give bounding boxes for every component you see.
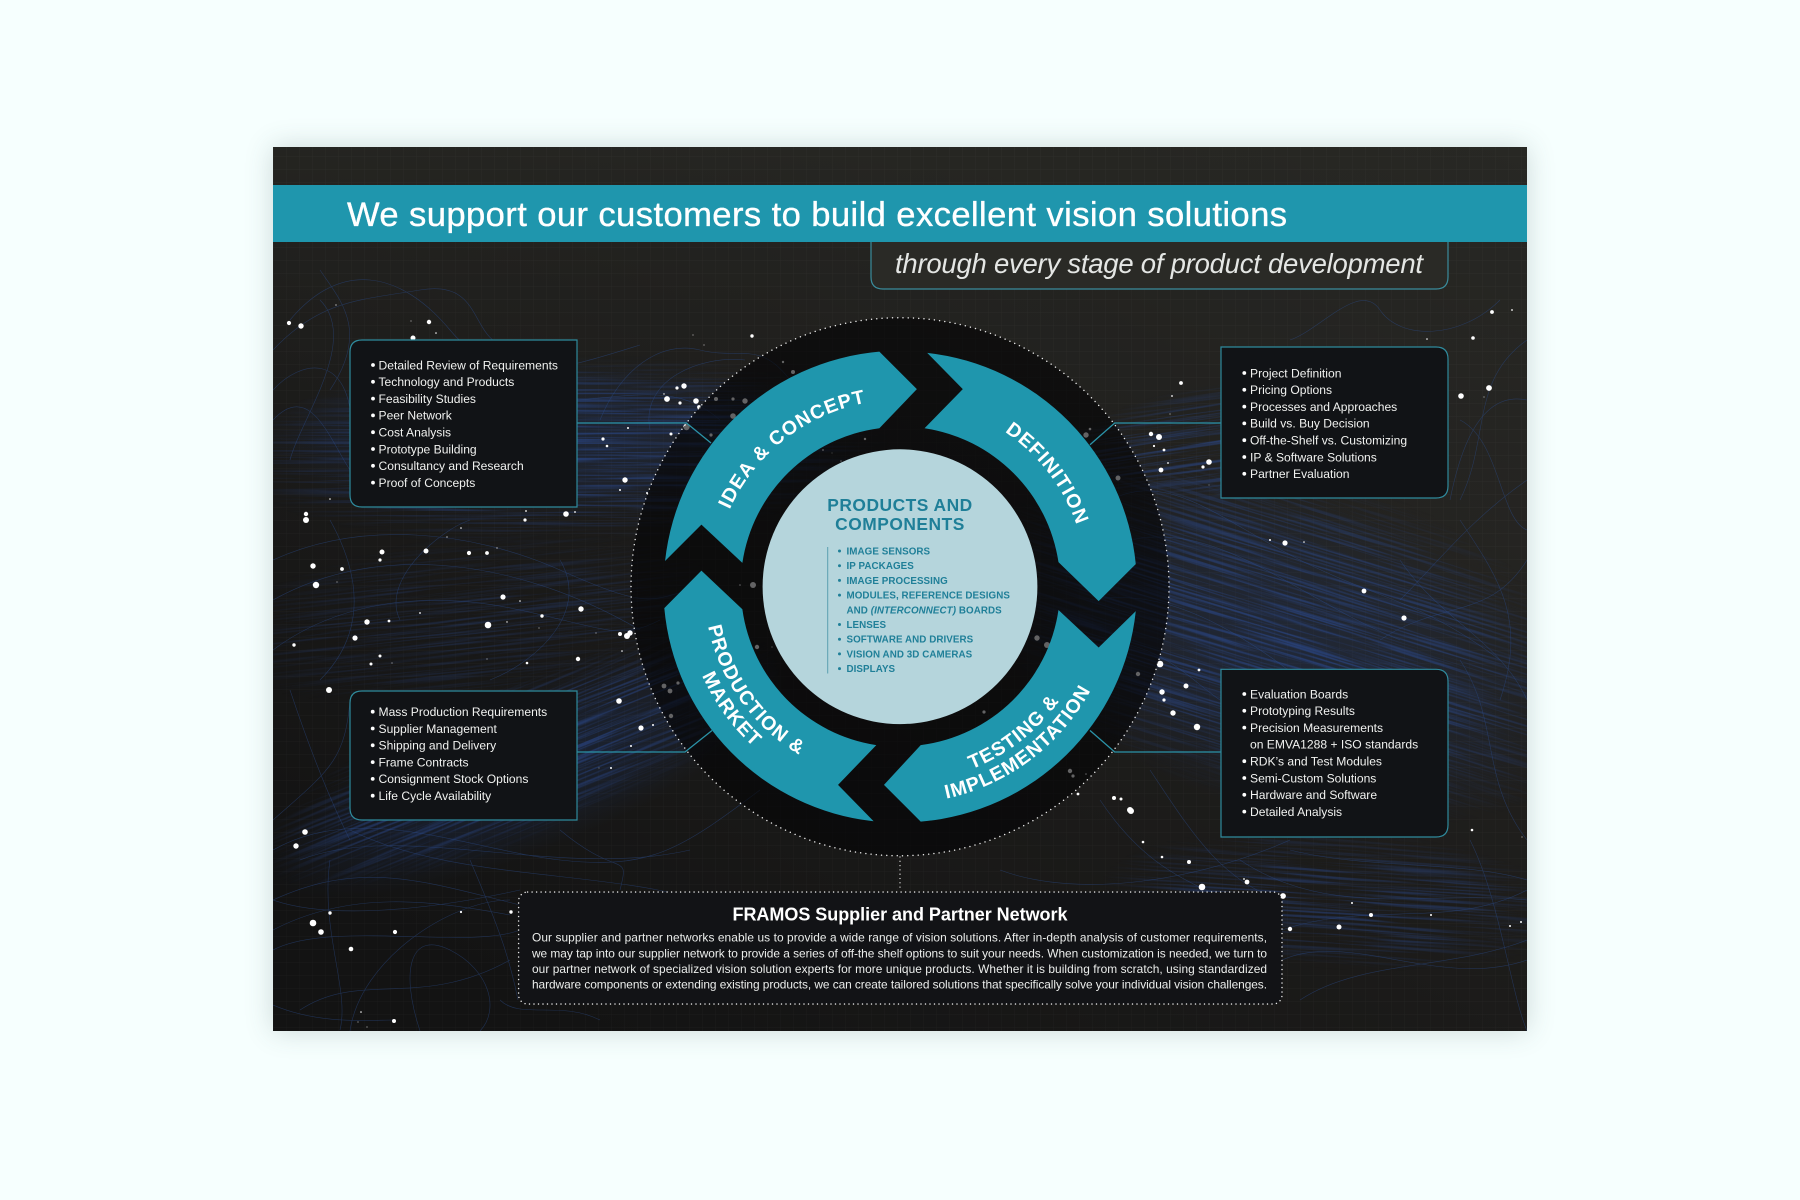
panel: products and components [763, 449, 1037, 724]
subtitle box: through every stage of product development [895, 248, 1424, 279]
panel: production and market details: Supplier Management [378, 722, 497, 736]
products heading: COMPONENTS [835, 514, 965, 534]
header band [273, 185, 1527, 242]
arrow: testing and implementation [884, 610, 1136, 822]
panel: testing and implementation details: Prototyping Results [1250, 704, 1355, 718]
network body text [531, 930, 1267, 992]
label: testing and implementation: IMPLEMENTATION [944, 685, 1090, 798]
products list: LENSES [846, 620, 887, 631]
subtitle box [871, 242, 1448, 289]
panel: definition details: Off-the-Shelf vs. Customizing [1250, 434, 1407, 448]
products list: MODULES, REFERENCE DESIGNS [846, 591, 1010, 602]
label: definition: DEFINITION [1006, 422, 1089, 524]
panel: production and market details: Consignment Stock Options [378, 772, 528, 786]
panel: idea and concept details: Cost Analysis [378, 426, 451, 440]
panel: idea and concept details: Consultancy and Research [378, 459, 524, 473]
panel: testing and implementation details: Detailed Analysis [1250, 805, 1342, 819]
panel: idea and concept details: Technology and Products [378, 375, 514, 389]
infographic card [273, 147, 1527, 1031]
panel: testing and implementation details: Hardware and Software [1250, 788, 1377, 802]
products list: VISION AND 3D CAMERAS [846, 649, 973, 660]
panel: testing and implementation details: RDK’s and Test Modules [1250, 754, 1382, 768]
products list: IMAGE PROCESSING [846, 576, 948, 587]
panel: idea and concept details [350, 340, 577, 507]
panel: production and market details: Frame Contracts [378, 755, 469, 769]
panel: production and market details: Shipping and Delivery [378, 739, 497, 753]
panel: testing and implementation details: Evaluation Boards [1250, 687, 1348, 701]
products list: AND (INTERCONNECT) BOARDS [846, 605, 1002, 616]
card shadow [273, 147, 1527, 1031]
arrow: definition [925, 353, 1136, 601]
label: production and market: MARKET [702, 670, 762, 744]
panel: production and market details: Life Cycle Availability [378, 789, 492, 803]
panel: idea and concept details: Proof of Concepts [378, 476, 475, 490]
panel: definition details: Partner Evaluation [1250, 467, 1350, 481]
products list: DISPLAYS [846, 664, 896, 675]
panel: production and market details: Mass Production Requirements [378, 705, 547, 719]
products list: IMAGE SENSORS [846, 546, 931, 558]
products list: IP PACKAGES [846, 561, 914, 572]
panel: idea and concept details: Prototype Building [378, 442, 477, 456]
network body text: Our supplier and partner networks enable us to provide a wide range of vision solutions. After in-depth analysis of customer requirements, [532, 930, 1267, 944]
network body text: our partner network of specialized vision solution experts for more unique products. Whether it is building from scratch, using standardized [532, 962, 1267, 976]
panel: testing and implementation details: Semi-Custom Solutions [1250, 771, 1376, 785]
products heading: PRODUCTS AND [827, 495, 973, 515]
label: production and market: PRODUCTION & [708, 624, 802, 754]
panel: definition details: IP & Software Solutions [1250, 450, 1377, 464]
panel: definition details: Processes and Approaches [1250, 400, 1397, 414]
network body text: we may tap into our supplier network to provide a series of off-the shelf options to suit your needs. When customization is needed, we turn to [531, 946, 1267, 960]
panel: idea and concept details: Detailed Review of Requirements [378, 358, 558, 372]
blue fibre network [273, 270, 1527, 1031]
dotted connector to network panel [899, 857, 901, 890]
network heading: FRAMOS Supplier and Partner Network [732, 905, 1068, 925]
arrow segments [664, 352, 1136, 822]
panel: idea and concept details: Peer Network [378, 409, 453, 423]
panel: idea and concept details: Feasibility Studies [378, 392, 476, 406]
connector lines [577, 423, 1221, 752]
panel: definition details: Build vs. Buy Decision [1250, 417, 1370, 431]
products list [838, 546, 1010, 675]
label: testing and implementation: TESTING & [966, 697, 1059, 768]
title: We support our customers to build excellent vision solutions [347, 196, 1287, 234]
wheel disc [631, 318, 1169, 856]
arrow: production and market [664, 571, 876, 821]
panel: testing and implementation details: Precision Measurements [1250, 721, 1383, 735]
panel: testing and implementation details [1221, 669, 1448, 837]
panel: supplier and partner network [519, 892, 1282, 1004]
process wheel [630, 317, 1170, 856]
star dots [287, 304, 1522, 1027]
network body text: hardware components or extending existing products, we can create tailored solutions that specifically solve your individual vision challenges. [532, 978, 1267, 992]
panel: production and market details [350, 691, 577, 820]
panel: definition details [1221, 347, 1448, 498]
label: idea and concept: IDEA & CONCEPT [718, 390, 863, 508]
dark background [273, 147, 1527, 1031]
products list: SOFTWARE AND DRIVERS [846, 635, 974, 646]
arrow: idea and concept [665, 352, 917, 563]
panel: testing and implementation details: on EMVA1288 + ISO standards [1250, 738, 1418, 752]
panel: definition details: Project Definition [1250, 366, 1341, 380]
panel: definition details: Pricing Options [1250, 383, 1332, 397]
